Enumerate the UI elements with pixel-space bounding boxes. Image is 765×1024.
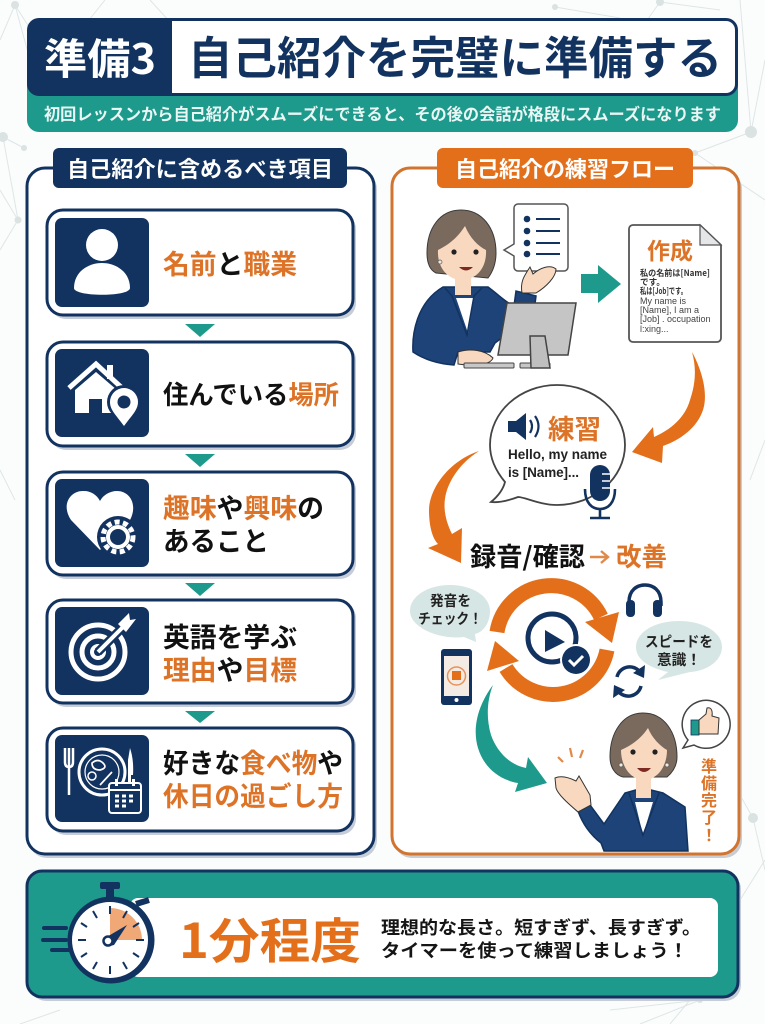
banner: one minute	[27, 871, 741, 1001]
icon: microphone	[585, 465, 615, 518]
icon: thumbs up bubble	[682, 700, 730, 748]
cycle arrows	[487, 586, 619, 694]
item: name and job	[47, 210, 356, 319]
bubble: practice: is [Name]...	[508, 465, 579, 480]
callout: pronunciation: 発音を	[430, 590, 471, 611]
panel heading: 自己紹介に含めるべき項目	[67, 152, 333, 184]
icon: speech bubble with list	[504, 204, 568, 293]
illustration: woman at computer	[413, 210, 576, 368]
item: hobbies: あること	[163, 520, 269, 559]
title: 自己紹介を完璧に準備する	[188, 22, 722, 87]
document: create: です。	[640, 276, 665, 288]
item: place of residence: 住んでいる場所	[163, 375, 339, 412]
subtitle: 初回レッスンから自己紹介がスムーズにできると、その後の会話が格段にスムーズになります	[44, 101, 721, 125]
item: favourite food and holidays	[47, 728, 356, 835]
item: reason for learning: 理由や目標	[163, 649, 297, 688]
icon: sync	[613, 665, 645, 698]
arrow	[185, 454, 215, 467]
bubble: practice	[490, 385, 625, 518]
document: create	[629, 225, 721, 342]
arrow	[185, 324, 215, 337]
document: create: My name is	[640, 296, 687, 306]
panel: items to include	[27, 148, 377, 858]
item: hobbies: 趣味や興味の	[163, 487, 324, 526]
item: reason for learning	[47, 600, 356, 707]
document: create: 私の名前は[Name]	[640, 267, 710, 279]
item: hobbies	[47, 472, 356, 579]
panel heading	[437, 148, 693, 188]
big label: 1分程度	[179, 902, 361, 972]
icon: play and check	[528, 614, 592, 676]
vertical label: ready: ！	[701, 822, 717, 846]
document: create: [Name], I am a	[640, 305, 699, 315]
description: 理想的な長さ。短すぎず、長すぎず。	[381, 914, 701, 940]
item: favourite food and holidays: 休日の過ごし方	[163, 775, 343, 814]
badge label: 準備3	[44, 26, 156, 87]
vertical label: ready: 備	[701, 770, 717, 794]
arrow: teal curve to woman	[476, 685, 547, 792]
vertical label: ready	[701, 753, 717, 846]
heading: record, check, improve: 録音/確認	[470, 537, 585, 574]
callout: speed: スピードを	[645, 631, 713, 652]
bubble: practice: 練習	[548, 408, 601, 447]
item: name and job: 名前と職業	[163, 243, 297, 282]
icon: headphones	[626, 585, 662, 617]
header	[27, 18, 738, 132]
callout: pronunciation	[410, 585, 490, 642]
heading: record, check, improve	[470, 537, 667, 574]
callout: speed: 意識！	[657, 649, 701, 670]
item: favourite food and holidays: 好きな食べ物や	[163, 742, 343, 781]
illustration: woman presenting	[555, 713, 688, 851]
document: create: l:xing...	[640, 324, 669, 334]
heading: record, check, improve: 改善	[616, 537, 667, 574]
arrow: teal right	[581, 265, 621, 303]
vertical label: ready: 準	[701, 753, 717, 777]
arrow: orange curve to practice	[632, 352, 705, 463]
icon: phone	[441, 649, 472, 705]
document: create: 私は[Job]です。	[640, 285, 687, 297]
arrow	[185, 583, 215, 596]
panel heading: 自己紹介の練習フロー	[455, 152, 675, 184]
document: create: 作成	[647, 232, 693, 266]
icon: stopwatch	[43, 882, 154, 984]
item: reason for learning: 英語を学ぶ	[163, 616, 297, 655]
vertical label: ready: 完	[701, 787, 717, 811]
banner: one minute: タイマーを使って練習しましょう！	[381, 937, 688, 963]
item: place of residence	[47, 342, 356, 450]
arrow	[185, 711, 215, 723]
callout: pronunciation: チェック！	[418, 608, 482, 629]
callout: speed	[636, 621, 722, 680]
panel: practice flow	[392, 148, 742, 858]
vertical label: ready: 了	[701, 804, 717, 828]
document: create: [Job] . occupation	[640, 314, 711, 324]
arrow: orange curve to review	[428, 451, 479, 563]
bubble: practice: Hello, my name	[508, 447, 607, 462]
